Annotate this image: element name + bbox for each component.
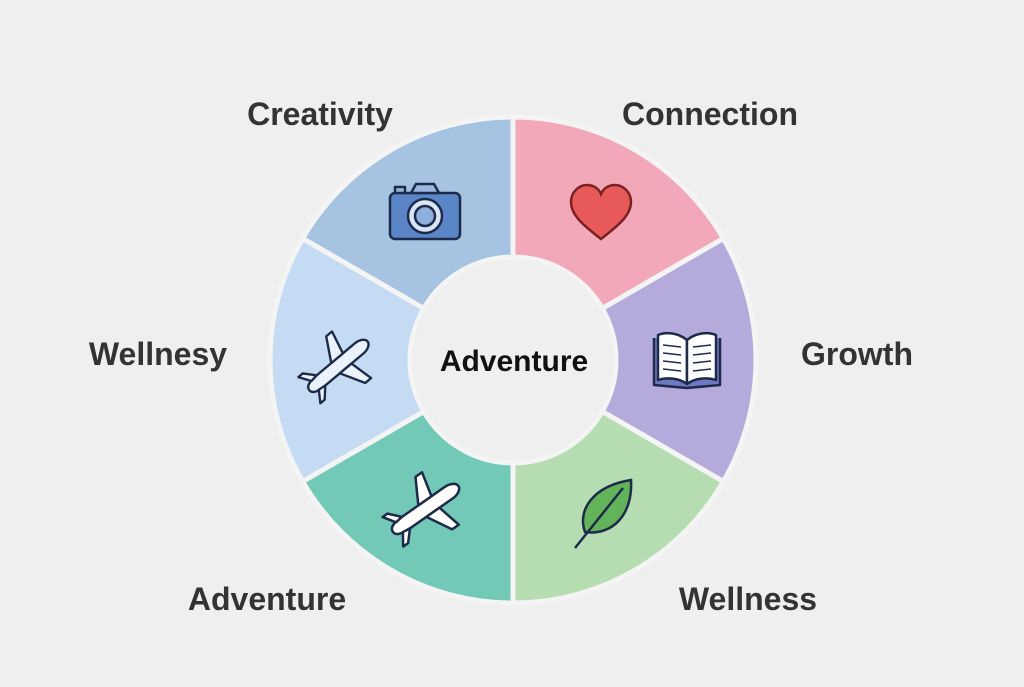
- icon: heart: [571, 185, 631, 239]
- center label: Adventure: [440, 345, 588, 378]
- segment: wellnesy: [270, 238, 424, 482]
- segment: wellness: [513, 412, 723, 603]
- label: creativity: Creativity: [247, 96, 393, 132]
- label: wellness: Wellness: [679, 581, 817, 617]
- icon: plane (wellnesy): [290, 318, 387, 413]
- icon: camera: [390, 184, 460, 239]
- segment: creativity: [303, 117, 513, 308]
- icon: plane (adventure): [375, 460, 477, 558]
- label: connection: Connection: [622, 96, 798, 132]
- center circle: [412, 259, 614, 461]
- label: growth: Growth: [801, 336, 913, 372]
- label: adventure: Adventure: [188, 581, 346, 617]
- donut chart: [270, 117, 756, 603]
- icon: book: [654, 333, 720, 388]
- segment: growth: [602, 238, 756, 482]
- segment: connection: [513, 117, 723, 308]
- labels: [89, 96, 913, 617]
- icon: leaf: [575, 480, 631, 548]
- segment: adventure: [303, 412, 513, 603]
- label: wellnesy: Wellnesy: [89, 336, 227, 372]
